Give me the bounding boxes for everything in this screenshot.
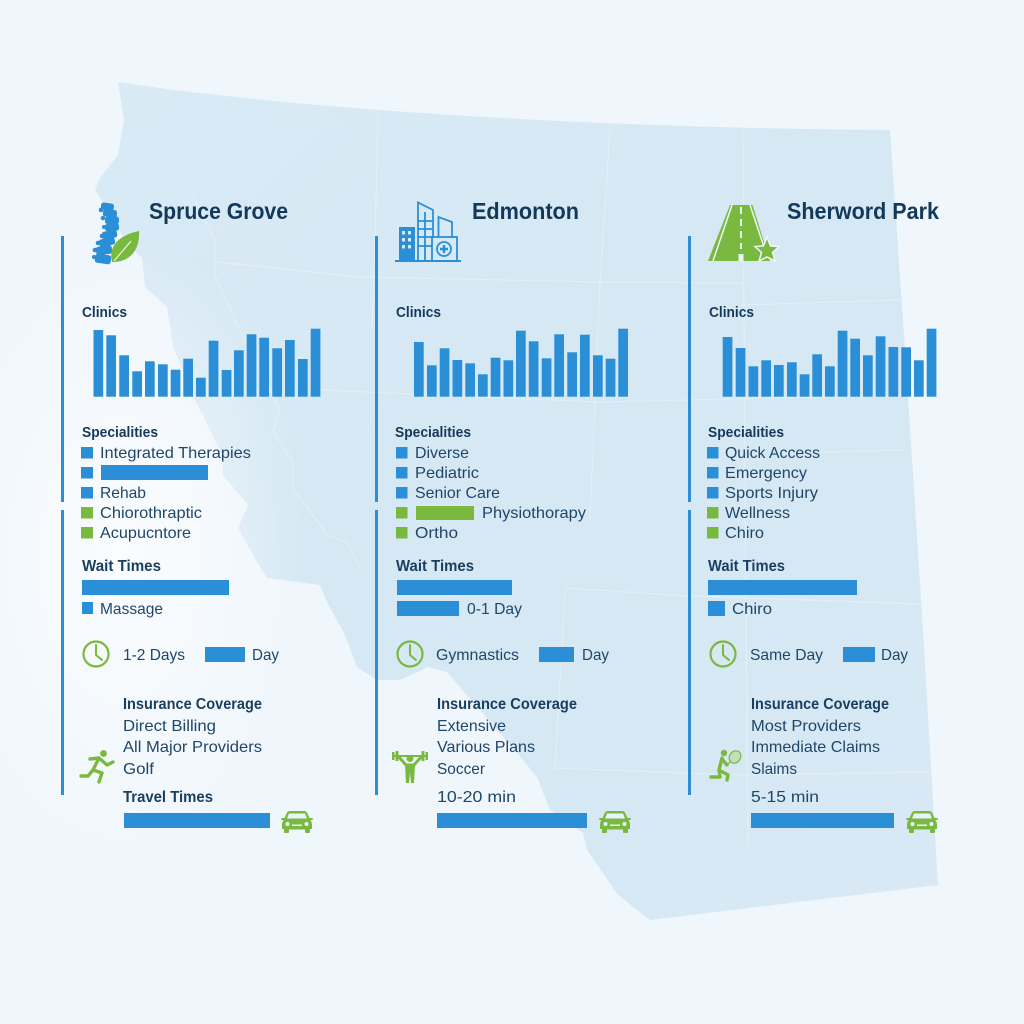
wait times: Day <box>252 647 279 664</box>
insurance coverage <box>123 696 262 778</box>
specialities: Rehab <box>100 485 146 502</box>
wait times: Day <box>881 647 908 664</box>
insurance coverage: Slaims <box>751 761 797 778</box>
insurance coverage <box>437 696 577 778</box>
insurance coverage: Insurance Coverage <box>437 696 577 713</box>
travel time: 5-15 min <box>751 789 819 806</box>
specialities: Integrated Therapies <box>100 445 251 462</box>
wait times: Wait Times <box>708 558 785 575</box>
insurance coverage: Immediate Claims <box>751 739 880 756</box>
specialities <box>707 425 820 542</box>
travel times: Travel Times <box>123 789 213 806</box>
title: Sherword Park <box>787 198 939 224</box>
wait times <box>708 558 908 666</box>
wait times: Chiro <box>732 601 772 618</box>
clinics heading: Clinics <box>709 305 754 321</box>
icon: car <box>906 811 938 833</box>
wait times: Wait Times <box>82 558 161 575</box>
specialities: Pediatric <box>415 465 479 482</box>
icon: tennis player <box>711 749 743 780</box>
icon: car <box>599 811 631 833</box>
column rule <box>61 236 64 795</box>
specialities <box>81 425 251 542</box>
clinics heading: Clinics <box>82 305 127 321</box>
icon: road and star <box>708 205 779 261</box>
wait times: 1-2 Days <box>123 647 185 664</box>
bar chart: clinics <box>723 329 936 397</box>
wait times: Gymnastics <box>436 647 519 664</box>
travel times <box>123 789 270 828</box>
insurance coverage: Golf <box>123 761 155 778</box>
travel time <box>751 789 894 828</box>
travel time: 10-20 min <box>437 789 516 806</box>
wait times: 0-1 Day <box>467 601 522 618</box>
specialities: Senior Care <box>415 485 500 502</box>
wait times: Wait Times <box>396 558 474 575</box>
insurance coverage: Various Plans <box>437 739 535 756</box>
specialities: Acupucntore <box>100 525 191 542</box>
icon: runner <box>81 750 113 782</box>
specialities: Chiorothraptic <box>100 505 202 522</box>
specialities: Physiothorapy <box>482 505 586 522</box>
clinics heading: Clinics <box>396 305 441 321</box>
insurance coverage: Direct Billing <box>123 718 216 735</box>
insurance coverage: Soccer <box>437 761 486 778</box>
specialities: Specialities <box>708 425 784 441</box>
insurance coverage <box>751 696 889 778</box>
specialities: Emergency <box>725 465 807 482</box>
specialities: Specialities <box>82 425 158 441</box>
bar chart: clinics <box>414 329 628 397</box>
title: Spruce Grove <box>149 198 288 224</box>
wait times <box>82 558 279 666</box>
specialities: Wellness <box>725 505 790 522</box>
map of the region <box>95 82 938 920</box>
specialities: Sports Injury <box>725 485 818 502</box>
column: Edmonton <box>375 198 631 833</box>
icon: spine and leaf <box>92 202 139 265</box>
insurance coverage: All Major Providers <box>123 739 262 756</box>
wait times: Day <box>582 647 609 664</box>
insurance coverage: Insurance Coverage <box>751 696 889 713</box>
specialities: Diverse <box>415 445 469 462</box>
column rule <box>688 236 691 795</box>
travel time <box>437 789 587 828</box>
insurance coverage: Insurance Coverage <box>123 696 262 713</box>
bar chart: clinics <box>94 329 320 397</box>
insurance coverage: Most Providers <box>751 718 861 735</box>
specialities <box>395 425 586 542</box>
specialities: Specialities <box>395 425 471 441</box>
soft glow behind left column <box>0 230 310 890</box>
column: Spruce Grove <box>61 198 320 833</box>
wait times: Massage <box>100 601 163 618</box>
specialities: Ortho <box>415 525 458 542</box>
icon: city buildings with clinic <box>395 202 461 261</box>
icon: weightlifter <box>392 751 428 783</box>
title: Edmonton <box>472 198 579 224</box>
column rule <box>375 236 378 795</box>
column: Sherword Park <box>688 198 939 833</box>
wait times <box>396 558 609 666</box>
wait times: Same Day <box>750 647 823 664</box>
icon: car <box>281 811 313 833</box>
specialities: Quick Access <box>725 445 820 462</box>
specialities: Chiro <box>725 525 764 542</box>
insurance coverage: Extensive <box>437 718 506 735</box>
